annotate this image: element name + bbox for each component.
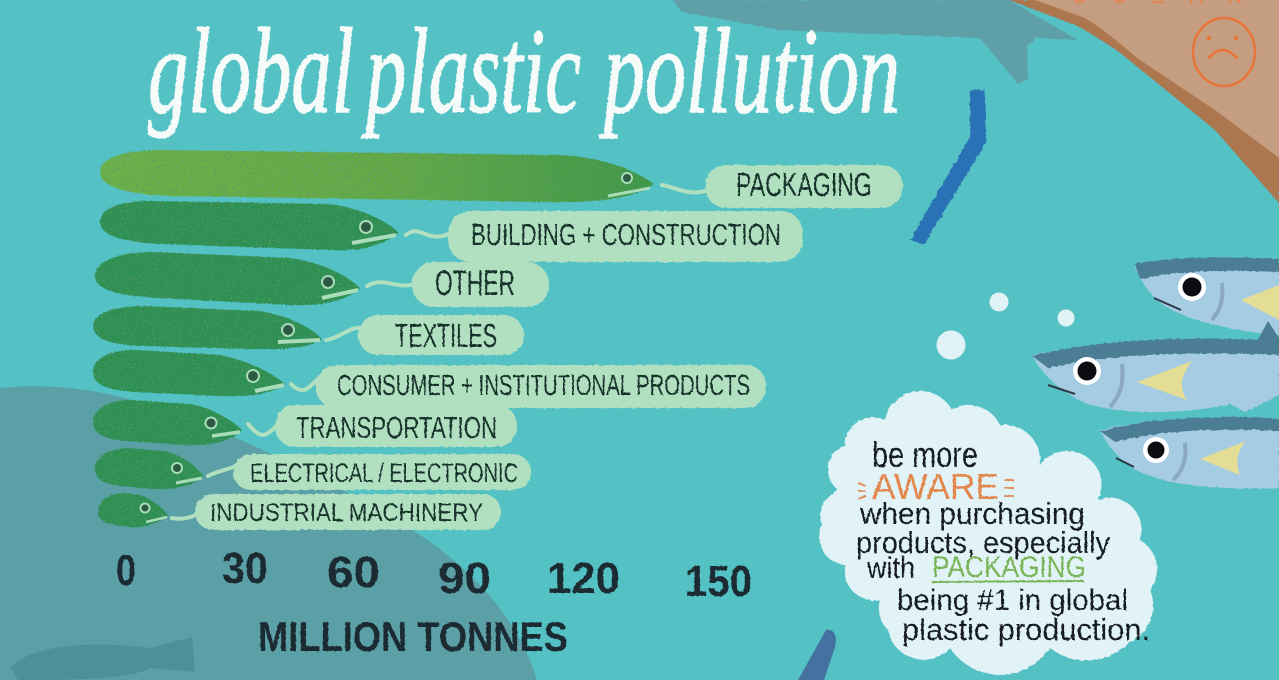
label: packaging bbox=[662, 165, 903, 208]
axis numbers: 120 bbox=[547, 554, 620, 603]
eel labels bbox=[172, 165, 903, 530]
eel: textiles bbox=[93, 306, 322, 349]
fish: top bbox=[1135, 257, 1279, 335]
eel: electrical and electronic bbox=[95, 448, 203, 489]
label: consumer and institutional products bbox=[291, 365, 766, 408]
eel: consumer and institutional products bbox=[93, 350, 285, 396]
small fish silhouette bbox=[10, 637, 195, 680]
fish school bbox=[1032, 257, 1279, 488]
rock silhouette bottom left bbox=[0, 386, 537, 680]
icon: sad face bbox=[1193, 18, 1255, 86]
cloud shape bbox=[819, 391, 1157, 675]
label: transportation: TRANSPORTATION bbox=[296, 410, 497, 445]
callout text: PACKAGING bbox=[932, 551, 1086, 584]
label: electrical and electronic bbox=[208, 454, 531, 490]
label: industrial machinery: INDUSTRIAL MACHINERY bbox=[210, 499, 483, 527]
callout text: plastic production. bbox=[902, 612, 1150, 647]
label: packaging: PACKAGING bbox=[736, 166, 872, 203]
eel: other bbox=[95, 252, 360, 305]
callout text: when purchasing bbox=[859, 496, 1085, 531]
callout text: being #1 in global bbox=[897, 584, 1128, 617]
callout text: with bbox=[866, 550, 915, 585]
label: other: OTHER bbox=[435, 264, 515, 303]
axis numbers: 0 bbox=[116, 546, 136, 595]
label: textiles bbox=[326, 315, 524, 355]
title: pollution bbox=[599, 4, 900, 139]
title: global bbox=[148, 4, 354, 139]
eel: industrial machinery bbox=[98, 493, 168, 527]
eel: packaging bbox=[100, 150, 654, 202]
label: textiles: TEXTILES bbox=[395, 317, 497, 354]
axis numbers: 150 bbox=[685, 557, 752, 606]
brown landmass panel bbox=[1009, 0, 1279, 203]
eel: transportation bbox=[93, 400, 242, 445]
label: other bbox=[367, 262, 549, 307]
bar chart: eels bbox=[93, 150, 654, 527]
blue stick bottom bbox=[798, 630, 836, 680]
label: electrical and electronic: ELECTRICAL / ELECTRONIC bbox=[250, 458, 518, 488]
land top bbox=[1035, 0, 1279, 158]
label: industrial machinery bbox=[172, 494, 501, 530]
axis numbers bbox=[116, 544, 752, 606]
fish: bottom bbox=[1100, 417, 1279, 488]
axis numbers: 90 bbox=[438, 554, 491, 603]
fish: middle bbox=[1032, 321, 1279, 412]
label: consumer and institutional products: CONSUMER + INSTITUTIONAL PRODUCTS bbox=[337, 370, 750, 402]
axis title: MILLION TONNES bbox=[258, 613, 568, 660]
shark silhouette top bbox=[672, 0, 1078, 84]
thought cloud callout bbox=[819, 391, 1157, 675]
title: plastic bbox=[361, 4, 581, 139]
label: building and construction: BUILDING + CONSTRUCTION bbox=[471, 217, 781, 252]
label: building and construction bbox=[406, 211, 803, 262]
callout text: be more bbox=[872, 434, 978, 475]
callout text: AWARE bbox=[872, 466, 999, 507]
title bbox=[148, 4, 900, 139]
land edge bbox=[1009, 0, 1279, 203]
callout text: products, especially bbox=[856, 525, 1110, 560]
bubbles bbox=[936, 292, 1074, 360]
axis numbers: 30 bbox=[222, 544, 268, 593]
eel: building and construction bbox=[100, 201, 398, 250]
blue plastic stick bbox=[910, 90, 986, 245]
axis numbers: 60 bbox=[327, 548, 380, 597]
callout text bbox=[856, 434, 1150, 647]
label: transportation bbox=[248, 405, 517, 447]
